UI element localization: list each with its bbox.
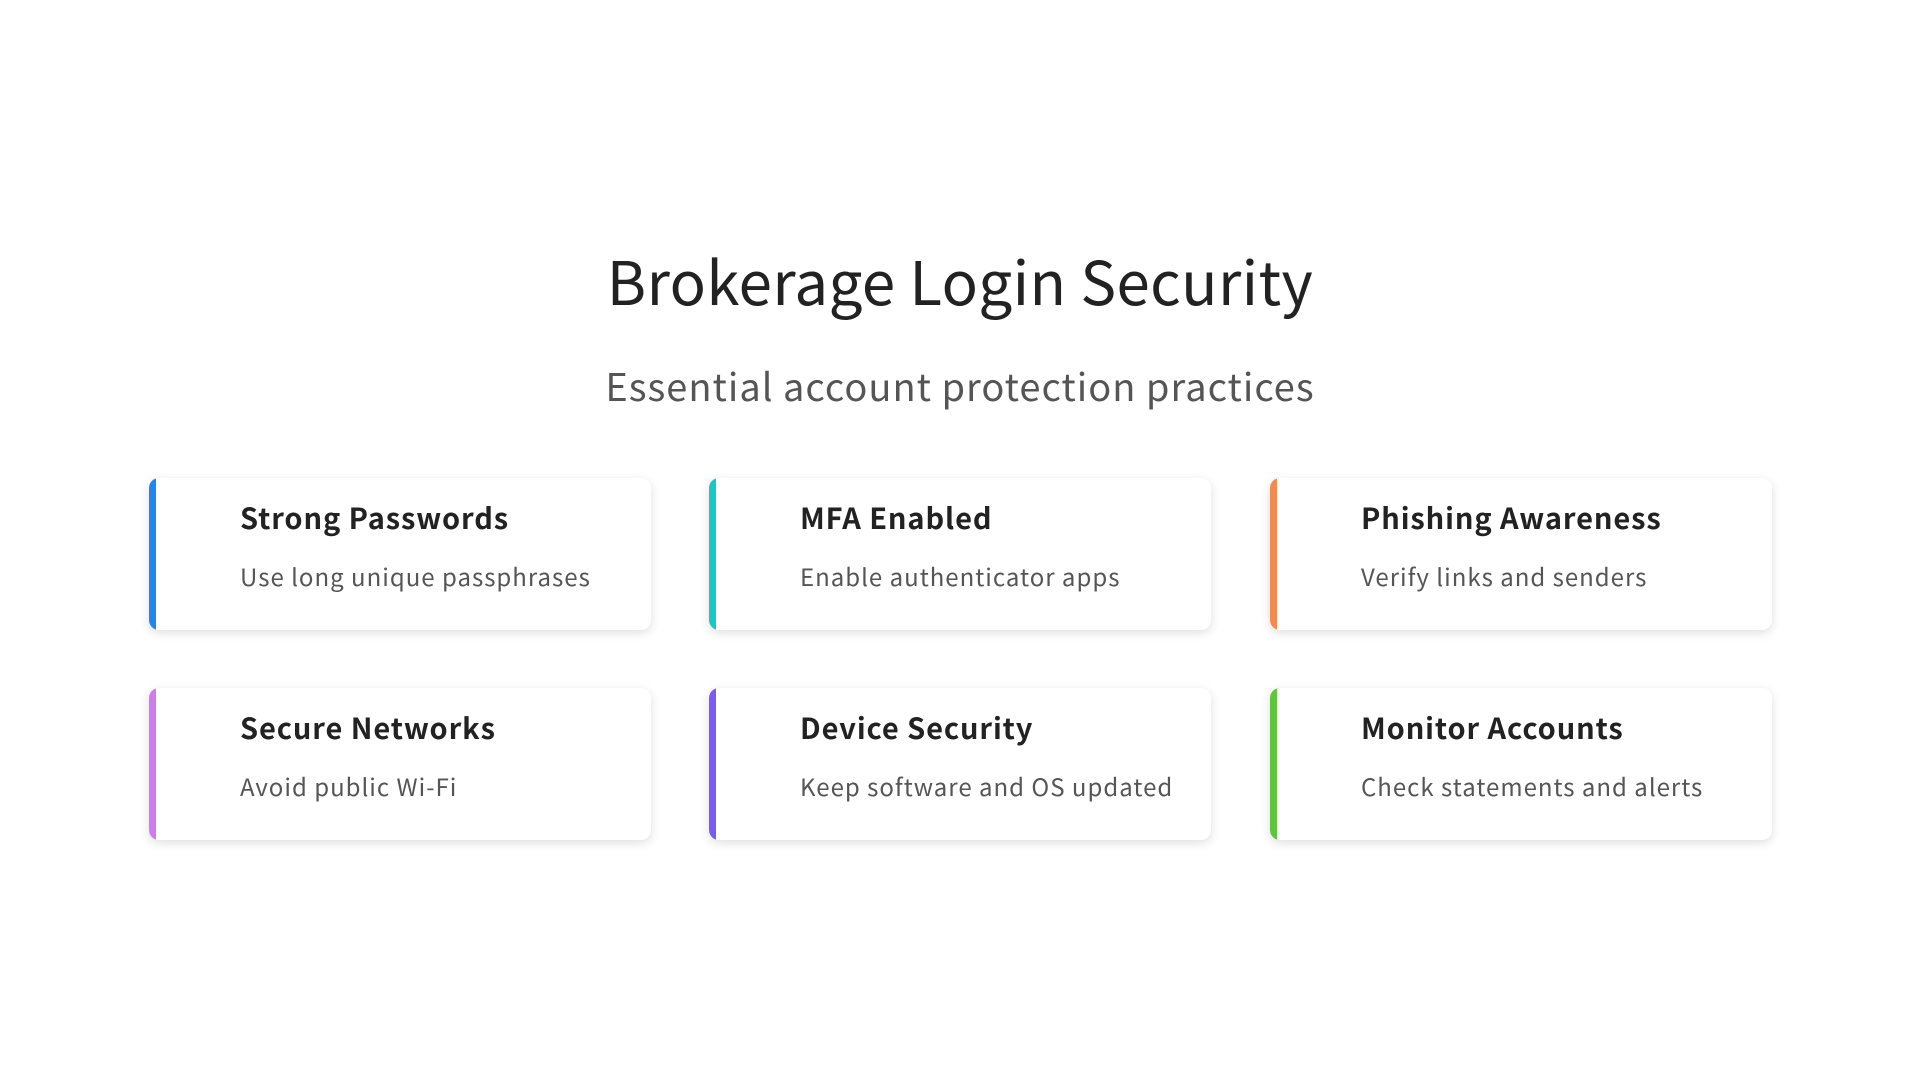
card: monitor: Monitor Accounts (1361, 706, 1624, 748)
card: device: Device Security (800, 706, 1033, 748)
card: MFA: Enable authenticator apps (800, 558, 1120, 593)
card: networks (149, 688, 651, 840)
card: phishing (1270, 478, 1772, 630)
card: monitor: Check statements and alerts (1361, 768, 1703, 803)
card: phishing: Phishing Awareness (1361, 496, 1662, 538)
card: device: Keep software and OS updated (800, 768, 1173, 803)
card: strong passwords (149, 478, 651, 630)
card: networks: Secure Networks (240, 706, 496, 748)
card: phishing: Verify links and senders (1361, 558, 1647, 593)
card: strong passwords: Strong Passwords (240, 496, 509, 538)
card: networks: Avoid public Wi-Fi (240, 768, 457, 803)
card: monitor (1270, 688, 1772, 840)
title: Brokerage Login Security (607, 236, 1313, 323)
subtitle: Essential account protection practices (605, 357, 1315, 412)
card: MFA (709, 478, 1211, 630)
card: strong passwords: Use long unique passphrases (240, 558, 591, 593)
card: MFA: MFA Enabled (800, 496, 992, 538)
card: device (709, 688, 1211, 840)
